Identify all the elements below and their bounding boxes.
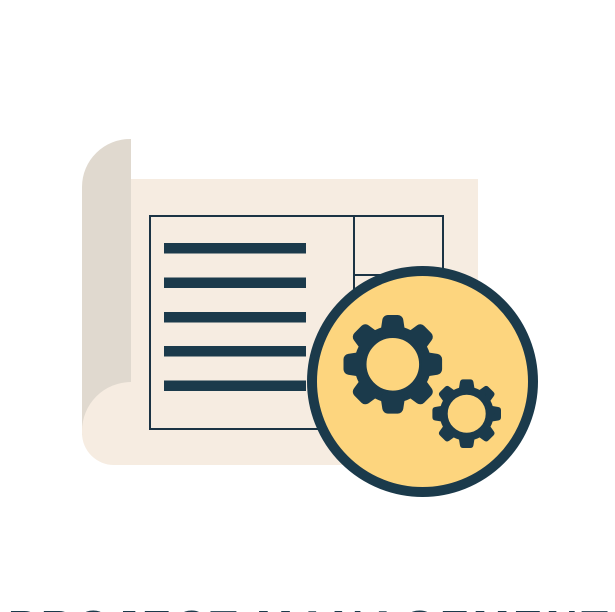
infographic canvas [10, 139, 608, 612]
panel: rolled blueprint sheet [82, 139, 478, 465]
icon: large gear [349, 320, 437, 408]
blueprint frame [150, 216, 443, 429]
rolled edge back [82, 139, 131, 435]
text lines [164, 243, 306, 391]
icon: small gear [436, 383, 498, 445]
sheet front [82, 179, 478, 465]
badge circle [312, 271, 533, 492]
